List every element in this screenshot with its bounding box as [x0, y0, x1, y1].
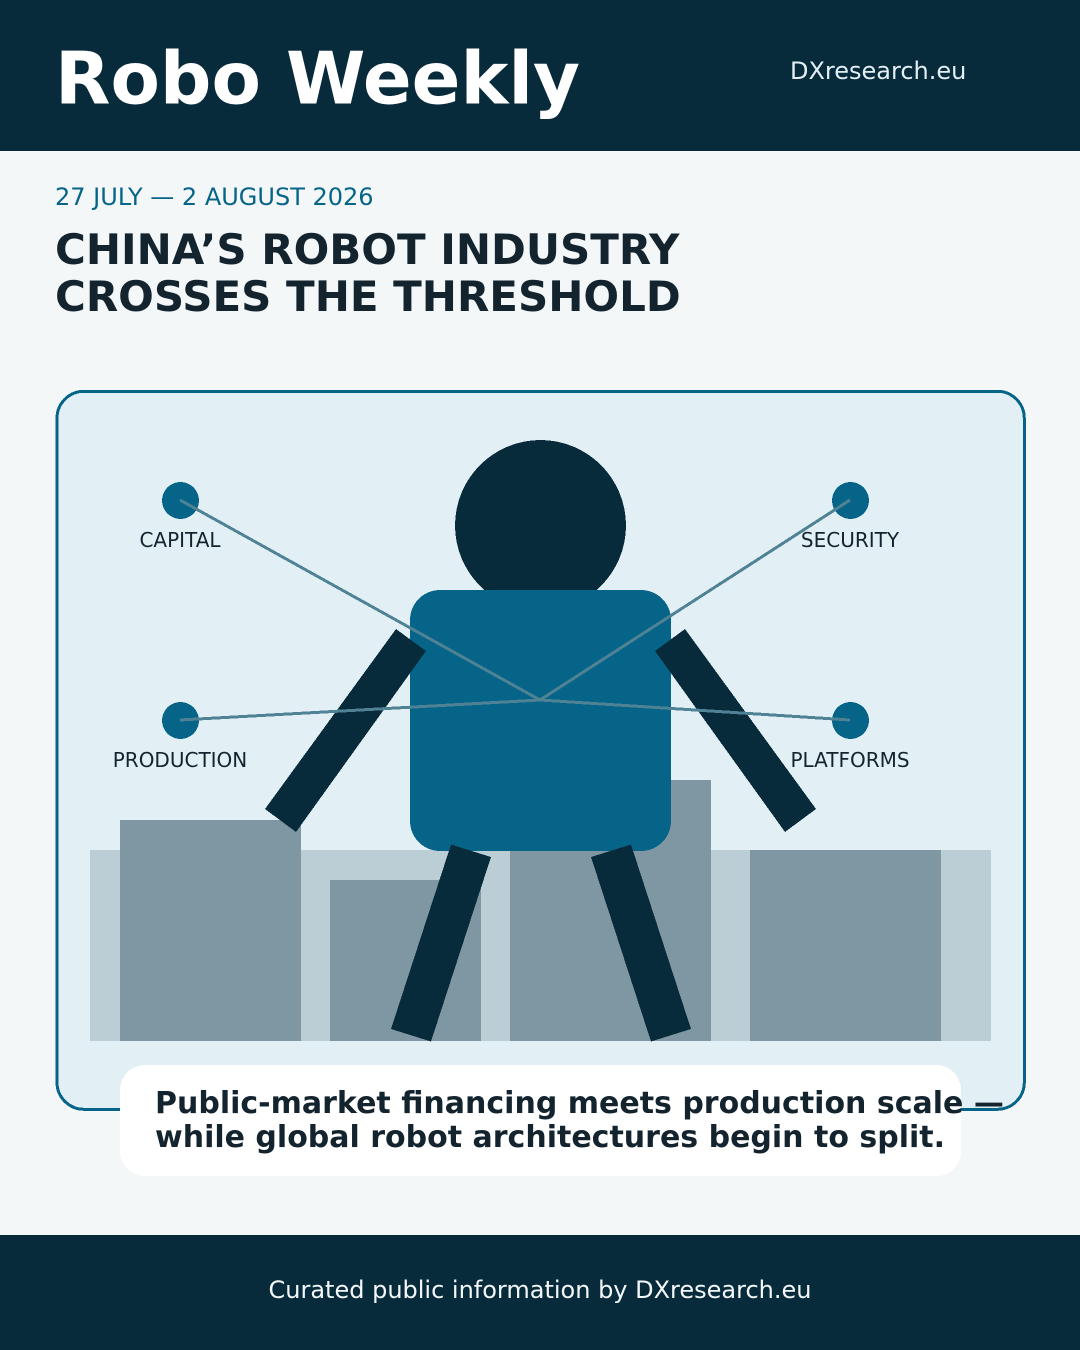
label: capital: CAPITAL	[139, 528, 221, 552]
icon: robot right leg	[591, 844, 691, 1042]
label: platforms: PLATFORMS	[790, 748, 910, 772]
label: production: PRODUCTION	[113, 748, 247, 772]
title: Robo Weekly	[55, 37, 580, 121]
icon: robot head	[455, 440, 626, 611]
headline: CHINA’S ROBOT INDUSTRY	[55, 225, 680, 274]
headline: CROSSES THE THRESHOLD	[55, 272, 681, 321]
icon: robot body	[410, 590, 671, 851]
connector lines	[180, 500, 850, 720]
node: capital	[162, 482, 199, 519]
node: production	[162, 702, 199, 739]
icon: robot right arm	[655, 629, 816, 832]
footer text: Curated public information by DXresearch.eu	[268, 1276, 812, 1304]
caption text: while global robot architectures begin to split.	[155, 1120, 945, 1155]
label: security: SECURITY	[801, 528, 900, 552]
caption box	[120, 1065, 961, 1176]
publisher name: DXresearch.eu	[790, 57, 966, 85]
icon: robot left leg	[391, 844, 491, 1042]
header band	[0, 0, 1080, 151]
panel: robot illustration	[57, 391, 1024, 1109]
node: platforms	[832, 702, 869, 739]
caption text	[155, 1086, 1004, 1155]
date line: 27 JULY — 2 AUGUST 2026	[55, 183, 374, 211]
caption text: Public-market financing meets production scale —	[155, 1086, 1004, 1121]
footer band	[0, 1235, 1080, 1350]
node: security	[832, 482, 869, 519]
icon: robot left arm	[265, 629, 426, 832]
bar chart backdrop	[90, 850, 991, 1041]
headline	[55, 225, 681, 321]
bar chart	[120, 780, 941, 1041]
